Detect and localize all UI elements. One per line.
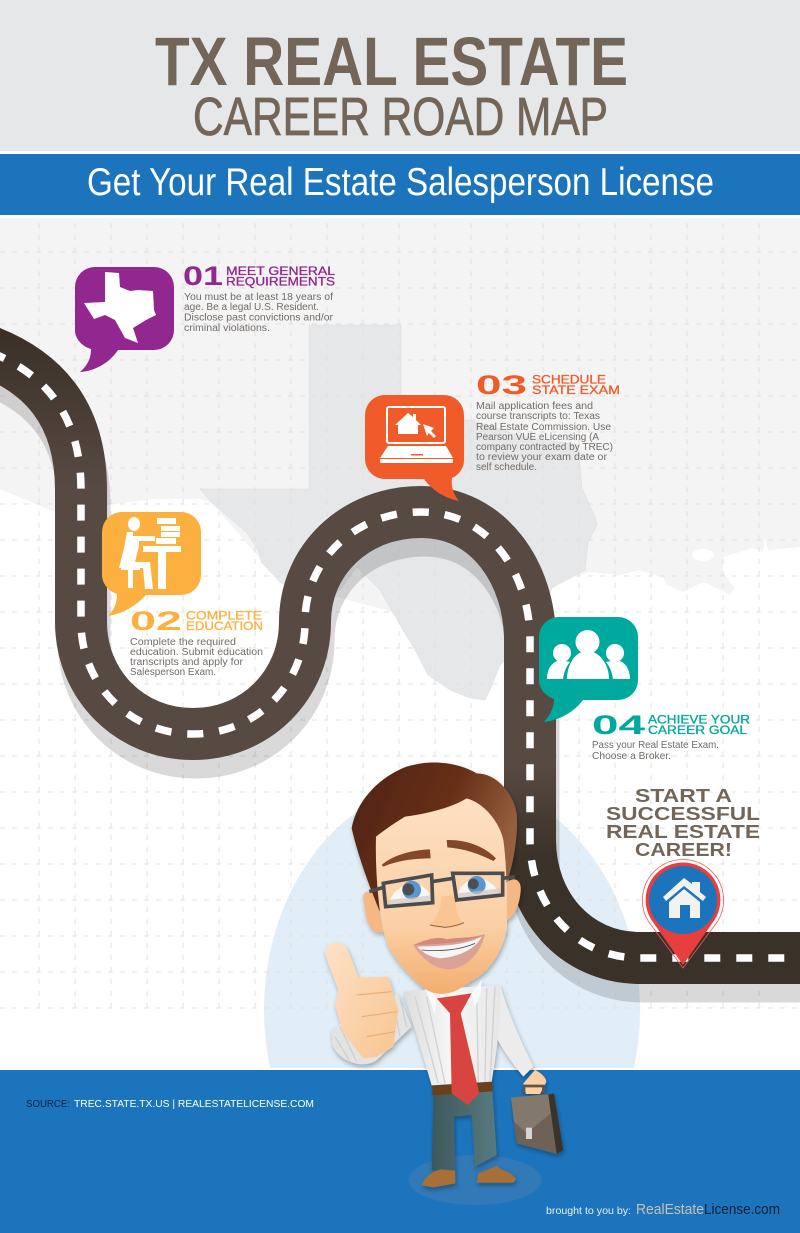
body text: education. Submit education	[130, 647, 263, 658]
map: lake	[692, 549, 714, 561]
character: businessman giving thumbs up	[325, 762, 563, 1205]
finger lines	[357, 992, 397, 1037]
icon: map pin with house	[642, 859, 724, 968]
step 01	[75, 261, 335, 372]
nose	[431, 895, 463, 928]
tie	[437, 993, 479, 1105]
body text: transcripts and apply for	[130, 657, 244, 668]
body text: age. Be a legal U.S. Resident.	[184, 302, 319, 313]
body text: self schedule.	[476, 462, 537, 473]
eyes	[387, 876, 500, 906]
upper lip	[413, 934, 485, 945]
brought to you by logo	[546, 1201, 780, 1218]
belt	[432, 1082, 492, 1095]
body text: criminal violations.	[184, 323, 270, 334]
body text: Choose a Broker.	[592, 751, 671, 762]
title: CAREER ROAD MAP	[193, 87, 608, 147]
brought to you by logo: brought to you by:	[546, 1205, 631, 1217]
collar	[423, 980, 482, 1015]
heading: ACHIEVE YOUR	[648, 712, 750, 726]
body text: company contracted by TREC)	[476, 442, 613, 453]
glasses	[369, 873, 515, 907]
shirt torso	[403, 985, 500, 1085]
number 02: 02	[130, 606, 182, 636]
icon: yellow speech bubble with student at desk	[102, 512, 201, 616]
right arm sleeve	[492, 985, 533, 1077]
heading	[532, 372, 620, 397]
body text	[476, 401, 613, 473]
light blue circle behind character	[264, 812, 640, 1068]
road	[0, 352, 800, 958]
body text	[592, 740, 719, 762]
icon: orange speech bubble with laptop	[365, 395, 464, 501]
road shadow	[0, 370, 800, 976]
hair	[352, 762, 517, 911]
map: land background	[0, 218, 800, 640]
brought to you by logo: RealEstate	[636, 1201, 704, 1218]
trousers	[432, 1091, 497, 1172]
thumb up hand	[325, 943, 398, 1058]
map: Texas outline	[200, 325, 597, 700]
number 01: 01	[183, 261, 223, 291]
callout: start a successful career: CAREER!	[635, 840, 732, 860]
body text: Complete the required	[130, 637, 236, 648]
body text: course transcripts to: Texas	[476, 411, 600, 422]
heading: MEET GENERAL	[226, 264, 335, 278]
ground shadow ellipse	[408, 1155, 542, 1205]
sleeve stripes	[335, 998, 407, 1062]
heading	[186, 608, 263, 633]
heading: EDUCATION	[186, 619, 263, 633]
shirt stripes	[415, 987, 495, 1083]
number 03: 03	[476, 370, 527, 400]
subtitle banner	[0, 154, 800, 215]
icon: teal speech bubble with people	[539, 617, 638, 722]
ears	[363, 879, 521, 932]
callout: start a successful career: SUCCESSFUL	[606, 804, 760, 824]
title: TX REAL ESTATE	[155, 23, 628, 100]
teeth	[417, 937, 482, 958]
figure	[325, 762, 563, 1187]
step 02	[102, 512, 263, 678]
mouth interior	[413, 934, 485, 969]
footer band	[0, 1070, 800, 1233]
heading	[648, 712, 750, 737]
heading: REQUIREMENTS	[226, 274, 335, 288]
left sleeve	[332, 993, 412, 1064]
body text: Salesperson Exam.	[130, 667, 216, 678]
body text: Real Estate Commission. Use	[476, 422, 611, 433]
title	[155, 23, 628, 147]
brought to you by logo: License.com	[704, 1201, 780, 1218]
source text: SOURCE:	[26, 1099, 70, 1110]
heading: COMPLETE	[186, 608, 262, 622]
body text	[184, 292, 334, 334]
source text: TREC.STATE.TX.US | REALESTATELICENSE.COM	[74, 1099, 314, 1110]
briefcase	[511, 1086, 563, 1154]
right hand with handle	[523, 1070, 546, 1094]
face	[376, 798, 507, 994]
step 03	[365, 370, 620, 501]
body text: Mail application fees and	[476, 401, 593, 412]
body text: Pass your Real Estate Exam.	[592, 740, 719, 751]
body text: Disclose past convictions and/or	[184, 312, 334, 324]
heading	[226, 264, 335, 288]
icon: purple speech bubble with Texas	[75, 267, 174, 372]
body text: to review your exam date or	[476, 452, 608, 463]
callout: start a successful career	[606, 786, 760, 860]
number 04: 04	[592, 710, 645, 740]
body text: Pearson VUE eLicensing (A	[476, 432, 599, 443]
heading: CAREER GOAL	[648, 723, 747, 737]
callout: start a successful career: REAL ESTATE	[606, 822, 760, 842]
step 04	[539, 617, 750, 762]
nostril line	[430, 923, 464, 927]
heading: SCHEDULE	[532, 372, 606, 386]
callout: start a successful career: START A	[635, 786, 732, 806]
eyebrows	[382, 840, 496, 867]
shoes	[422, 1166, 516, 1187]
teeth line	[422, 943, 475, 951]
body text: You must be at least 18 years of	[184, 292, 333, 303]
heading: STATE EXAM	[532, 383, 620, 397]
body text	[130, 637, 263, 678]
header band	[0, 0, 800, 151]
background grid	[0, 223, 800, 1010]
